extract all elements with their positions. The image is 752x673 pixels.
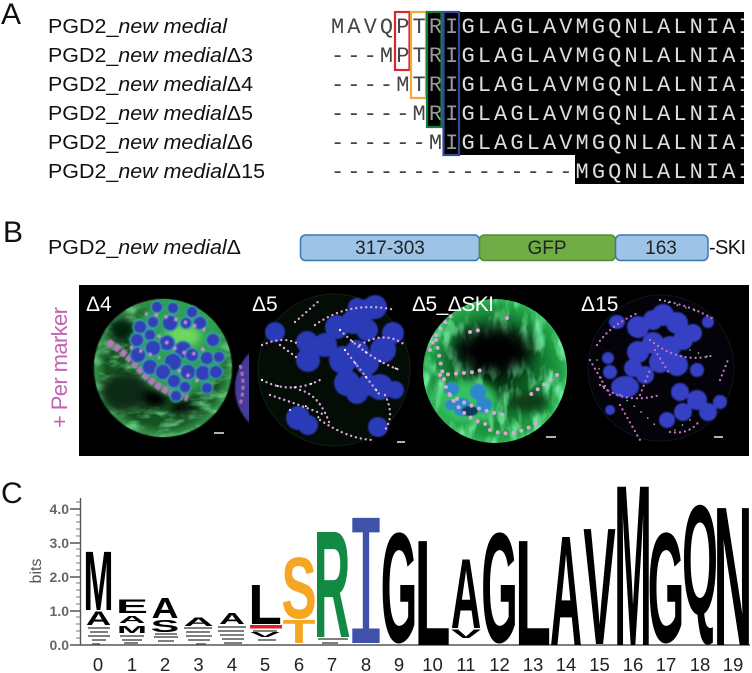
domain GFP: GFP (527, 238, 567, 259)
y axis: 2.0 (50, 569, 69, 585)
image labels: Δ5_ΔSKI (412, 293, 494, 316)
sequence names: PGD2_new medial Δ3 (48, 45, 253, 67)
aligned sequences: -----MRIGLAGLAVMGQNLALNIAI (331, 102, 752, 127)
aligned sequences: ---------------MGQNLALNIAI (331, 160, 752, 185)
logo letters: Q (682, 474, 718, 648)
sequence names: PGD2_new medial (48, 16, 228, 38)
image labels: Δ4 (86, 293, 112, 316)
logo letters: G (648, 500, 684, 673)
logo letters: R (314, 500, 350, 671)
panel B: microscopy images (79, 285, 749, 456)
embryo Δ5_ΔSKI (423, 299, 567, 443)
sequence names (48, 16, 265, 183)
logo letters: V (250, 631, 281, 639)
logo letters (84, 438, 752, 673)
y axis title: bits (28, 559, 45, 583)
panel letter C: C (1, 477, 23, 510)
logo letters: M (117, 624, 147, 635)
black conserved residue shading (427, 12, 744, 184)
aligned sequences: ---MPTRIGLAGLAVMGQNLALNIAI (331, 44, 752, 69)
panel A: sequence alignment (1, 0, 752, 190)
logo letters: L (515, 509, 551, 673)
embryo Δ4 (94, 295, 232, 437)
sequence names: PGD2_new medial Δ5 (48, 103, 253, 125)
logo letters: E (116, 596, 148, 617)
image labels: Δ5 (252, 293, 278, 316)
logo letters: A (451, 539, 481, 650)
logo letters: S (151, 616, 179, 636)
scale bars (214, 433, 723, 442)
embryo Δ5 (258, 294, 410, 446)
y axis: 0.0 (50, 637, 69, 653)
aligned sequences (331, 15, 752, 185)
logo letters: V (451, 627, 481, 640)
aligned sequences: MAVQPTRIGLAGLAVMGQNLALNIAI (331, 15, 752, 40)
logo letters: A (183, 615, 214, 629)
image labels (86, 293, 618, 316)
logo stripes (88, 627, 348, 644)
y axis: 1.0 (50, 603, 69, 619)
logo letters: A (118, 614, 146, 625)
neighbouring partial embryo (234, 352, 249, 424)
aligned sequences: ----MTRIGLAGLAVMGQNLALNIAI (331, 73, 752, 98)
logo letters: S (281, 541, 317, 637)
panel C: sequence logo (1, 438, 752, 673)
domain 163: 163 (645, 238, 677, 259)
domain 317-303 (300, 235, 480, 260)
construct name: PGD2_new medial Δ (48, 237, 241, 259)
sequence names: PGD2_new medial Δ15 (48, 161, 265, 183)
domain GFP (480, 235, 616, 260)
side label: Per marker: + Per marker (47, 307, 72, 428)
y axis: 4.0 (50, 501, 69, 517)
panel letter B: B (3, 216, 23, 249)
logo letters: G (481, 500, 518, 673)
sequence names: PGD2_new medial Δ6 (48, 132, 253, 154)
y axis (50, 498, 750, 653)
domain 163 (616, 235, 708, 260)
black image background (79, 285, 749, 456)
logo letters: A (151, 593, 179, 625)
logo letters: A (219, 610, 245, 627)
y axis: 3.0 (50, 535, 69, 551)
panel B: construct diagram (3, 216, 746, 260)
x axis labels (93, 654, 743, 673)
logo letters: A (86, 608, 111, 629)
image labels: Δ15 (581, 293, 618, 316)
embryo Δ15 (588, 295, 734, 441)
aligned sequences: ------MIGLAGLAVMGQNLALNIAI (331, 131, 752, 156)
logo letters: T (283, 612, 315, 650)
logo letters: G (381, 500, 417, 673)
domain 317-303: 317-303 (355, 238, 425, 259)
highlight boxes (395, 12, 459, 155)
logo letters: L (248, 572, 282, 636)
SKI label: -SKI (709, 237, 746, 259)
sequence names: PGD2_new medial Δ4 (48, 74, 253, 96)
logo letters: M (84, 533, 113, 628)
logo letters: L (414, 509, 451, 673)
